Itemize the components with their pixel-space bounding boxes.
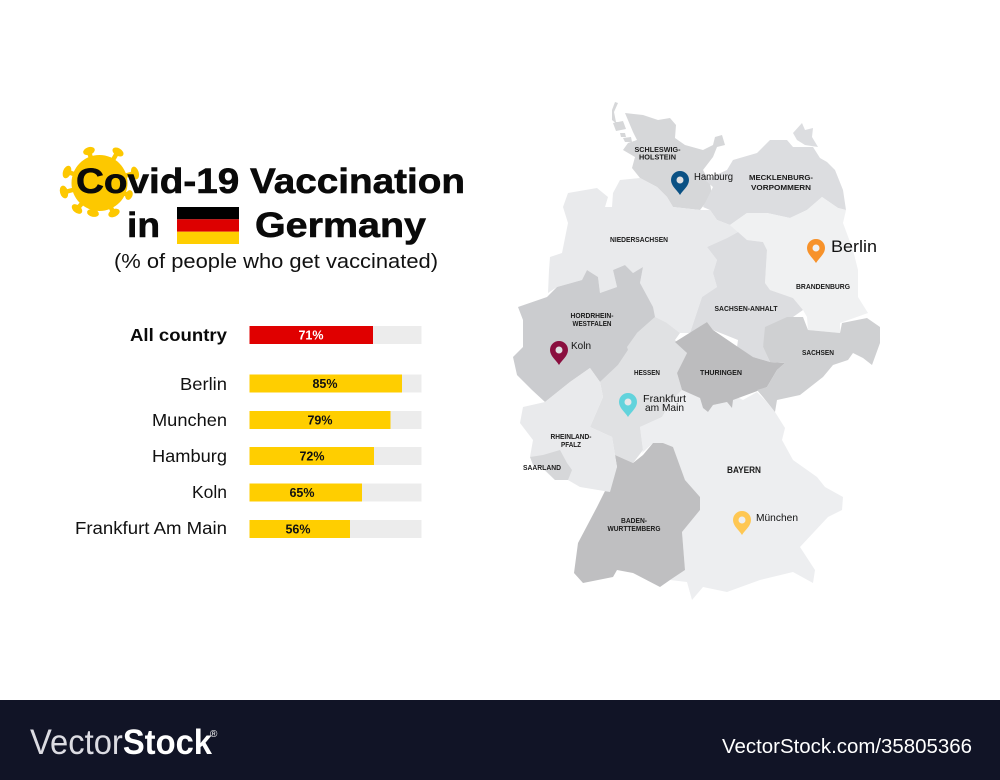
footer band: [0, 700, 1000, 780]
state labels: WURTTEMBERG: [608, 524, 661, 533]
region: Brandenburg: [730, 197, 868, 333]
subtitle: (% of people who get vaccinated): [114, 251, 438, 273]
bar row: Berlin: Berlin: [180, 374, 227, 394]
bar row: Berlin: 85%: [312, 377, 338, 391]
icon: German flag: [177, 207, 239, 244]
state labels: VORPOMMERN: [751, 183, 811, 192]
pin: Berlin: [807, 237, 877, 263]
icon: virus: [58, 146, 140, 219]
bar row: All country: [130, 325, 422, 345]
registered mark: ®: [210, 729, 218, 740]
region: Hessen: [590, 317, 687, 463]
bar row: Hamburg: [152, 446, 422, 466]
state labels: MECKLENBURG-: [749, 173, 814, 182]
bar row: Koln: [192, 482, 422, 502]
region: Sachsen-Anhalt: [690, 232, 803, 362]
footer logo: VectorStock: [30, 723, 212, 762]
bar chart: vaccination rates: [75, 325, 422, 538]
state labels: BRANDENBURG: [796, 282, 850, 291]
state labels: SACHSEN: [802, 348, 834, 357]
region: Thuringen: [675, 322, 785, 412]
bar row: Koln: 65%: [289, 486, 315, 500]
title: Germany: [255, 206, 427, 245]
pin: Koln: [550, 340, 591, 365]
bar row: Frankfurt Am Main: 56%: [285, 522, 311, 536]
region: Schleswig-Holstein: [612, 102, 725, 210]
region: Sachsen: [757, 317, 880, 412]
map of Germany: [513, 102, 880, 600]
bar row: Hamburg: 72%: [299, 450, 325, 464]
region: Mecklenburg-Vorpommern: [703, 123, 846, 225]
state labels: BADEN-: [621, 516, 647, 525]
region: Nordrhein-Westfalen: [513, 265, 655, 402]
bar row: Munchen: 79%: [307, 414, 333, 428]
bar row: Koln: Koln: [192, 482, 227, 502]
region: Niedersachsen: [548, 178, 738, 333]
pin: Frankfurt am Main: Frankfurt: [643, 393, 686, 405]
state labels: HOLSTEIN: [639, 152, 676, 162]
pin: Koln: Koln: [571, 340, 591, 352]
bar row: Berlin: [180, 374, 422, 394]
state labels: SCHLESWIG-: [634, 145, 681, 154]
pin: Munchen: München: [756, 512, 798, 524]
state labels: THURINGEN: [700, 368, 742, 377]
state labels: HESSEN: [634, 368, 660, 377]
bar row: Munchen: Munchen: [152, 410, 227, 430]
pin: Hamburg: Hamburg: [694, 171, 733, 183]
state labels: BAYERN: [727, 465, 761, 475]
state labels: WESTFALEN: [572, 319, 612, 328]
pin: Hamburg: [671, 171, 733, 195]
title: Covid-19 Vaccination: [76, 162, 465, 201]
state labels: NIEDERSACHSEN: [610, 235, 668, 244]
bar row: Munchen: [152, 410, 422, 430]
region: Baden-Wurttemberg: [574, 443, 700, 587]
state labels: PFALZ: [561, 440, 581, 449]
bar row: Frankfurt Am Main: [75, 518, 422, 538]
title: [76, 162, 465, 245]
bar row: All country: 71%: [298, 328, 324, 342]
region: Saarland: [530, 450, 572, 480]
state labels: [523, 145, 850, 533]
pin: Munchen: [733, 511, 798, 535]
title: in: [127, 206, 160, 245]
state labels: HORDRHEIN-: [570, 311, 614, 320]
state labels: SACHSEN-ANHALT: [714, 304, 778, 313]
state labels: SAARLAND: [523, 463, 562, 472]
pin: Frankfurt am Main: [619, 393, 686, 417]
bar row: All country: All country: [130, 325, 227, 345]
bar row: Hamburg: Hamburg: [152, 446, 227, 466]
state labels: RHEINLAND-: [550, 432, 592, 441]
region: Bayern: [640, 390, 843, 600]
region: Rheinland-Pfalz: [520, 368, 617, 492]
pin: Berlin: Berlin: [831, 237, 877, 256]
footer image id: VectorStock.com/35805366: [722, 736, 972, 758]
bar row: Frankfurt Am Main: Frankfurt Am Main: [75, 518, 227, 538]
pin: Frankfurt am Main: am Main: [645, 402, 684, 414]
